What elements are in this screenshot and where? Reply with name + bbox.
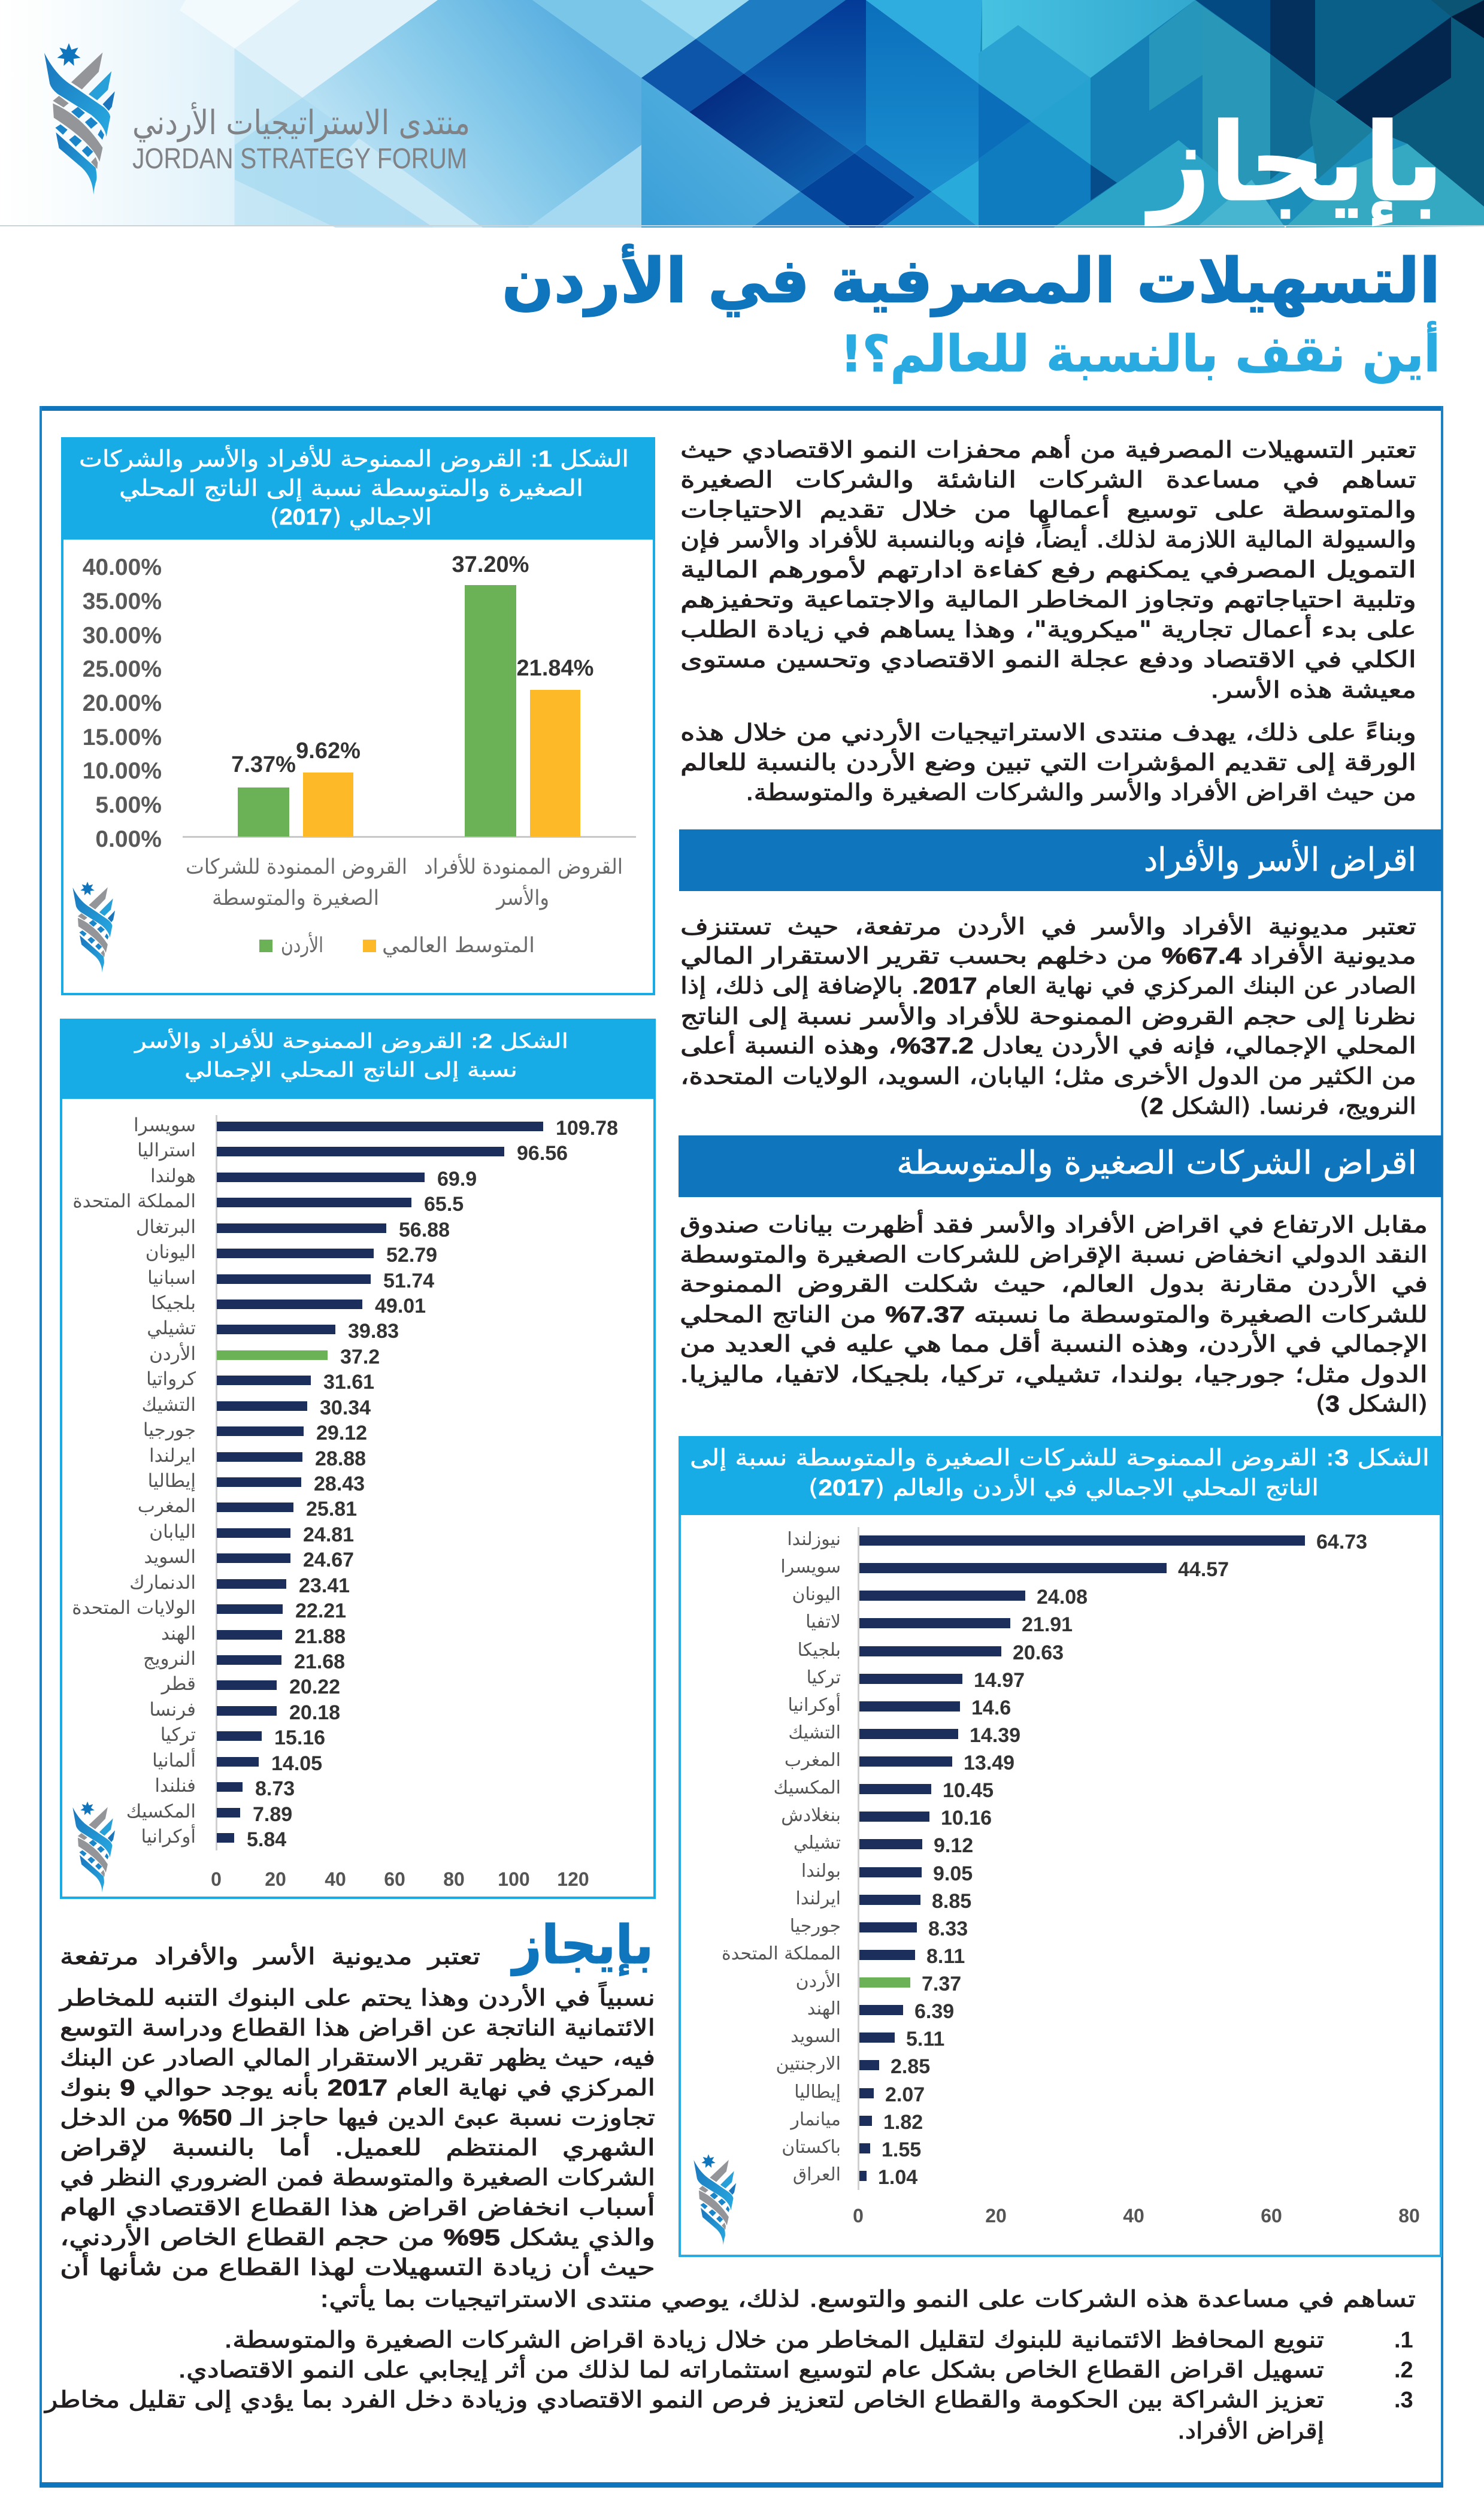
- household text: من الكثير من الدول الأخرى مثل؛ اليابان، السويد، الولايات المتحدة،: [680, 1062, 1416, 1090]
- category labels: الهند: [161, 1623, 196, 1644]
- x axis labels: 80: [1398, 2205, 1420, 2227]
- x axis labels: [853, 2205, 1420, 2227]
- y axis labels: 20.00%: [83, 690, 162, 716]
- figure 3 header: الشكل 3: القروض الممنوحة للشركات الصغيرة والمتوسطة نسبة إلى: [690, 1444, 1430, 1471]
- summary text: حيث أن زيادة التسهيلات لهذا القطاع من شأنها أن: [60, 2252, 655, 2281]
- y axis labels: 0.00%: [95, 826, 162, 852]
- category labels: استراليا: [137, 1140, 196, 1161]
- value labels: 2.07: [885, 2083, 925, 2106]
- value labels: [878, 1531, 1367, 2189]
- category labels: تشيلي: [794, 1832, 841, 1853]
- category labels: نيوزلندا: [787, 1529, 841, 1550]
- category labels: سويسرا: [134, 1114, 196, 1136]
- section heading: household loans: اقراض الأسر والأفراد: [1144, 840, 1416, 879]
- summary text: [59, 1942, 1416, 2313]
- category labels: إيطاليا: [148, 1470, 196, 1492]
- section heading: SME loans: اقراض الشركات الصغيرة والمتوسطة: [897, 1144, 1417, 1182]
- value labels: 21.68: [294, 1650, 345, 1673]
- category labels: التشيك: [141, 1394, 196, 1416]
- legend: المتوسط العالمي: [382, 934, 535, 958]
- value labels: 8.11: [926, 1945, 965, 1968]
- icon: small emblem: [72, 1801, 115, 1892]
- x axis labels: 80: [443, 1868, 465, 1890]
- category labels: تركيا: [160, 1724, 196, 1746]
- category labels: المغرب: [785, 1750, 841, 1771]
- bars: [859, 1535, 1305, 2181]
- category labels: والأسر: [495, 884, 549, 910]
- value labels: 23.41: [299, 1574, 350, 1597]
- panel: figure 2: [60, 1019, 656, 1898]
- value labels: 14.6: [971, 1697, 1011, 1719]
- category labels: القروض الممنودة للأفراد: [424, 853, 623, 879]
- household text: مديونية الأفراد 67.4% من دخلهم بحسب تقرير الاستقرار المالي: [680, 941, 1416, 970]
- legend: [259, 932, 535, 958]
- category labels: الأردن: [149, 1342, 196, 1365]
- intro text: على بدء أعمال تجارية "ميكروية"، وهذا يساهم في زيادة الطلب: [680, 614, 1416, 643]
- value labels: 39.83: [348, 1320, 399, 1343]
- category labels: بنغلادش: [781, 1805, 841, 1826]
- value labels: 14.97: [974, 1669, 1025, 1692]
- intro text: تساهم في مساعدة الشركات الناشئة والشركات الصغيرة: [680, 467, 1416, 493]
- value labels: 20.22: [289, 1676, 340, 1698]
- category labels: الهند: [807, 1998, 841, 2019]
- category labels: ميانمار: [789, 2109, 841, 2130]
- value labels: 24.67: [303, 1549, 354, 1571]
- recommendations list: تسهيل اقراض القطاع الخاص بشكل عام لتوسيع استثماراته لما لذلك من أثر إيجابي على النمو الاقتصادي.: [178, 2355, 1324, 2383]
- household text: [680, 912, 1416, 1120]
- value labels: 9.12: [934, 1834, 973, 1857]
- category labels: المغرب: [138, 1495, 196, 1517]
- figure 2 header: [60, 1019, 656, 1099]
- category labels: الصغيرة والمتوسطة: [212, 886, 379, 910]
- value labels: 8.73: [255, 1777, 295, 1800]
- icon: small emblem: [693, 2154, 736, 2245]
- value labels: 21.88: [295, 1625, 346, 1648]
- x axis labels: 60: [1261, 2205, 1282, 2227]
- household text: النرويج، فرنسا. (الشكل 2): [1140, 1093, 1416, 1120]
- x axis labels: 40: [325, 1868, 346, 1890]
- value labels: [247, 1117, 618, 1851]
- value labels: 56.88: [399, 1219, 450, 1241]
- category labels: فنلندا: [155, 1775, 196, 1797]
- value labels: 8.85: [932, 1890, 971, 1913]
- x axis labels: 40: [1123, 2205, 1144, 2227]
- category labels: القروض الممنودة للشركات: [186, 855, 407, 879]
- value labels: 44.57: [1178, 1558, 1229, 1581]
- x axis labels: [211, 1868, 589, 1890]
- category labels: الدنمارك: [129, 1572, 196, 1594]
- summary text: نسبياً في الأردن وهذا يحتم على البنوك التنبه للمخاطر: [59, 1982, 655, 2012]
- category labels: ألمانيا: [152, 1748, 196, 1771]
- category labels: باكستان: [782, 2137, 841, 2158]
- category labels: فرنسا: [149, 1699, 196, 1720]
- value labels: 29.12: [316, 1422, 367, 1444]
- value labels: 13.49: [964, 1752, 1014, 1774]
- SME text: في الأردن مقارنة بدول العالم، حيث شكلت القروض الممنوحة: [680, 1270, 1428, 1298]
- y axis labels: 30.00%: [83, 623, 162, 649]
- household text: تعتبر مديونية الأفراد والأسر في الأردن مرتفعة، حيث تستنزف: [680, 912, 1416, 940]
- summary text: والذي يشكل 95% من حجم القطاع الخاص الأردني،: [60, 2223, 655, 2251]
- subtitle: أين نقف بالنسبة للعالم؟!: [840, 321, 1440, 384]
- value labels: 2.85: [891, 2055, 930, 2078]
- category labels: كرواتيا: [146, 1368, 196, 1390]
- value labels: 28.88: [315, 1447, 366, 1470]
- value labels: 24.81: [303, 1523, 354, 1546]
- category labels: بلجيكا: [151, 1292, 196, 1314]
- data labels: 21.84%: [517, 656, 593, 681]
- figure 2 header: الشكل 2: القروض الممنوحة للأفراد والأسر: [134, 1028, 568, 1053]
- figure 3 header: [679, 1436, 1442, 1515]
- value labels: 7.89: [253, 1803, 292, 1826]
- value labels: 96.56: [517, 1142, 568, 1165]
- logo: Jordan Strategy Forum: JORDAN STRATEGY FORUM: [132, 143, 467, 175]
- value labels: 28.43: [314, 1473, 365, 1495]
- summary text: تعتبر مديونية الأسر والأفراد مرتفعة: [60, 1942, 480, 1970]
- y axis labels: 15.00%: [83, 725, 162, 750]
- icon: forum emblem: [44, 43, 115, 195]
- recommendations list: .3: [1394, 2388, 1413, 2413]
- summary text: تساهم في مساعدة هذه الشركات على النمو والتوسع. لذلك، يوصي منتدى الاستراتيجيات بما يأتي:: [320, 2283, 1416, 2313]
- y axis labels: [83, 555, 162, 852]
- x axis labels: 60: [384, 1868, 405, 1890]
- category labels: اسبانيا: [147, 1267, 196, 1289]
- category labels: المملكة المتحدة: [722, 1943, 841, 1964]
- recommendations list: إقراض الأفراد.: [1177, 2416, 1324, 2444]
- value labels: 20.18: [289, 1701, 340, 1724]
- household text: المحلي الإجمالي، فإنه في الأردن يعادل 37.2%، وهذه النسبة أعلى: [680, 1031, 1416, 1059]
- section heading: household loans: [679, 829, 1442, 891]
- recommendations list: تعزيز الشراكة بين الحكومة والقطاع الخاص لتعزيز فرص النمو الاقتصادي وزيادة دخل الفرد بما يؤدي إلى تقليل مخاطر: [44, 2386, 1324, 2413]
- category labels: [72, 1114, 196, 1847]
- data labels: [231, 552, 593, 777]
- x axis labels: 100: [498, 1868, 530, 1890]
- summary block: [44, 1914, 1416, 2444]
- household text: نظرنا إلى حجم القروض الممنوحة للأفراد والأسر نسبة إلى الناتج: [680, 1002, 1416, 1030]
- bars: [238, 585, 580, 837]
- category labels: ايرلندا: [795, 1888, 841, 1909]
- value labels: 37.2: [340, 1346, 380, 1368]
- figure 1 header: الاجمالي (2017): [270, 504, 432, 530]
- category labels: الأردن: [796, 1969, 841, 1992]
- category labels: هولندا: [150, 1165, 196, 1187]
- value labels: 8.33: [928, 1918, 968, 1940]
- logo: Jordan Strategy Forum: [44, 43, 470, 195]
- x axis labels: 120: [557, 1868, 589, 1890]
- category labels: المكسيك: [126, 1801, 196, 1822]
- category labels: [186, 853, 623, 910]
- data labels: 9.62%: [296, 738, 361, 764]
- value labels: 20.63: [1013, 1641, 1064, 1664]
- value labels: 1.82: [883, 2111, 923, 2134]
- value labels: 6.39: [914, 2000, 954, 2023]
- value labels: 5.11: [906, 2028, 944, 2050]
- category labels: بلجيكا: [798, 1640, 841, 1661]
- category labels: اليونان: [146, 1241, 196, 1263]
- category labels: أوكرانيا: [141, 1824, 196, 1847]
- data labels: 37.20%: [452, 552, 529, 577]
- category labels: السويد: [144, 1546, 196, 1568]
- value labels: 5.84: [247, 1828, 286, 1851]
- SME text: الدول مثل؛ جورجيا، بولندا، تشيلي، تركيا، بلجيكا، لاتفيا، ماليزيا.: [680, 1361, 1428, 1388]
- value labels: 14.39: [970, 1724, 1020, 1747]
- summary text: فيه، حيث يظهر تقرير الاستقرار المالي الصادر عن البنك: [60, 2044, 655, 2071]
- category labels: جورجيا: [790, 1916, 841, 1937]
- category labels: إيطاليا: [794, 2082, 841, 2103]
- category labels: [722, 1529, 841, 2185]
- category labels: الولايات المتحدة: [72, 1597, 196, 1619]
- intro text: الكلي في الاقتصاد ودفع عجلة النمو الاقتصادي وتحسين مستوى: [680, 646, 1416, 673]
- summary text: المركزي في نهاية العام 2017 بأنه يوجد حوالي 9 بنوك: [60, 2072, 655, 2101]
- intro text: وتلبية احتياجاتهم وتجاوز المخاطر المالية والاجتماعية وتحفيزهم: [680, 586, 1416, 613]
- category labels: المملكة المتحدة: [72, 1191, 196, 1212]
- SME text: النقد الدولي انخفاض نسبة الإقراض للشركات الصغيرة والمتوسطة: [680, 1241, 1428, 1268]
- value labels: 1.55: [882, 2138, 921, 2161]
- value labels: 1.04: [878, 2166, 917, 2189]
- SME text: مقابل الارتفاع في اقراض الأفراد والأسر فقد أظهرت بيانات صندوق: [680, 1210, 1428, 1238]
- recommendations list: .1: [1394, 2328, 1413, 2353]
- category labels: تركيا: [807, 1667, 841, 1688]
- value labels: 24.08: [1037, 1586, 1088, 1609]
- category labels: سويسرا: [780, 1556, 841, 1577]
- bar chart: household loans by country: [72, 1114, 618, 1890]
- x axis labels: 20: [985, 2205, 1007, 2227]
- x axis labels: 0: [211, 1868, 222, 1890]
- category labels: قطر: [160, 1673, 196, 1695]
- value labels: 9.05: [933, 1862, 973, 1885]
- logo: Jordan Strategy Forum: منتدى الاستراتيجيات الأردني: [132, 102, 470, 143]
- figure 3 header: الناتج المحلي الاجمالي في الأردن والعالم (2017): [808, 1473, 1319, 1501]
- category labels: اليابان: [149, 1521, 196, 1543]
- category labels: لاتفيا: [805, 1612, 841, 1632]
- category labels: بولندا: [801, 1861, 841, 1882]
- recommendations list: تنويع المحافظ الائتمانية للبنوك لتقليل المخاطر من خلال زيادة اقراض الشركات الصغيرة والمتوسطة.: [224, 2327, 1324, 2353]
- intro text: التمويل المصرفي يمكنهم رفع كفاءة ادارتهم لأمورهم المالية: [680, 555, 1416, 583]
- recommendations list: .2: [1394, 2358, 1413, 2383]
- y axis labels: 5.00%: [95, 792, 162, 818]
- category labels: جورجيا: [143, 1419, 196, 1441]
- summary text: الشركات الصغيرة والمتوسطة فمن الضروري النظر في: [60, 2164, 655, 2191]
- category labels: البرتغال: [136, 1216, 196, 1238]
- summary heading: بإيجاز: [510, 1914, 653, 1976]
- summary text: تجاوزت نسبة عبئ الدين فيها حاجز الـ 50% من الدخل: [60, 2104, 655, 2131]
- recommendations list: [44, 2327, 1413, 2444]
- category labels: تشيلي: [147, 1317, 196, 1339]
- value labels: 22.21: [295, 1600, 346, 1622]
- SME text: للشركات الصغيرة والمتوسطة ما نسبته 7.37% من الناتج المحلي: [680, 1301, 1428, 1328]
- category labels: التشيك: [788, 1722, 841, 1743]
- household text: الصادر عن البنك المركزي في نهاية العام 2017. بالإضافة إلى ذلك، إذا: [680, 973, 1416, 999]
- figure 1 header: [61, 437, 655, 540]
- category labels: أوكرانيا: [788, 1692, 841, 1716]
- SME text: الإجمالي في الأردن، وهذه النسبة أقل مما هي عليه في العديد من: [680, 1329, 1428, 1358]
- intro text: الورقة إلى تقديم المؤشرات التي تبين وضع الأردن بالنسبة للعالم: [680, 748, 1416, 776]
- panel: figure 3: [679, 1436, 1442, 2256]
- bars: [217, 1122, 543, 1843]
- category labels: ايرلندا: [149, 1445, 196, 1467]
- y axis labels: 40.00%: [83, 555, 162, 580]
- icon: small emblem: [72, 882, 115, 973]
- figure 1 header: الشكل 1: القروض الممنوحة للأفراد والأسر والشركات: [79, 444, 629, 472]
- category labels: النرويج: [143, 1648, 196, 1670]
- title: التسهيلات المصرفية في الأردن: [502, 244, 1440, 317]
- panel: figure 1: [61, 437, 655, 994]
- value labels: 64.73: [1316, 1531, 1367, 1553]
- x axis labels: 0: [853, 2205, 864, 2227]
- figure 1 header: الصغيرة والمتوسطة نسبة إلى الناتج المحلي: [119, 475, 583, 502]
- value labels: 52.79: [386, 1244, 437, 1267]
- y axis labels: 35.00%: [83, 589, 162, 614]
- legend: الأردن: [281, 932, 323, 958]
- SME text: (الشكل 3): [1316, 1391, 1428, 1417]
- summary text: الائتمانية الناتجة عن اقراض هذا القطاع ودراسة التوسع: [60, 2015, 655, 2041]
- intro text: والسيولة المالية اللازمة لذلك. أيضاً، فإنه وبالنسبة للأفراد والأسر فإن: [680, 523, 1416, 553]
- SME text: [680, 1210, 1428, 1417]
- intro text: والمتوسطة على توسيع أعمالها من خلال تقديم الاحتياجات: [680, 495, 1416, 523]
- value labels: 14.05: [271, 1752, 322, 1775]
- x axis labels: 20: [265, 1868, 286, 1890]
- value labels: 15.16: [274, 1726, 325, 1749]
- y axis labels: 10.00%: [83, 758, 162, 784]
- intro text: من حيث اقراض الأفراد والأسر والشركات الصغيرة والمتوسطة.: [746, 778, 1416, 806]
- value labels: 69.9: [437, 1168, 477, 1191]
- value labels: 10.16: [941, 1807, 992, 1829]
- header banner: [0, 0, 1484, 228]
- category labels: السويد: [791, 2026, 841, 2047]
- value labels: 49.01: [375, 1295, 426, 1317]
- bar chart: SME loans by country: [722, 1527, 1420, 2227]
- figure 2 header: نسبة إلى الناتج المحلي الإجمالي: [184, 1058, 517, 1082]
- intro text: تعتبر التسهيلات المصرفية من أهم محفزات النمو الاقتصادي حيث: [680, 435, 1416, 464]
- value labels: 31.61: [323, 1371, 374, 1394]
- category labels: اليونان: [792, 1584, 841, 1605]
- intro text: معيشة هذه الأسر.: [1210, 676, 1416, 704]
- value labels: 30.34: [320, 1397, 371, 1419]
- banner tag word: بإيجاز: [1145, 101, 1443, 226]
- data labels: 7.37%: [231, 752, 296, 777]
- value labels: 65.5: [424, 1193, 464, 1216]
- column chart: [83, 552, 636, 958]
- category labels: الارجنتين: [776, 2053, 841, 2074]
- value labels: 109.78: [556, 1117, 618, 1140]
- value labels: 25.81: [306, 1498, 357, 1520]
- outer frame: [40, 406, 1443, 2488]
- y axis labels: 25.00%: [83, 656, 162, 682]
- value labels: 21.91: [1022, 1613, 1073, 1636]
- intro text: [680, 435, 1416, 806]
- category labels: العراق: [793, 2164, 841, 2185]
- value labels: 51.74: [383, 1270, 434, 1292]
- summary text: الشهري المنتظم للعميل. أما بالنسبة لإقراض: [60, 2132, 655, 2161]
- value labels: 10.45: [943, 1779, 994, 1802]
- section heading: SME loans: [679, 1135, 1442, 1197]
- summary text: أسباب انخفاض اقراض هذا القطاع الاقتصادي الهام: [60, 2192, 655, 2221]
- intro text: وبناءً على ذلك، يهدف منتدى الاستراتيجيات الأردني من خلال هذه: [680, 718, 1416, 746]
- value labels: 7.37: [922, 1973, 961, 1995]
- category labels: المكسيك: [774, 1777, 841, 1798]
